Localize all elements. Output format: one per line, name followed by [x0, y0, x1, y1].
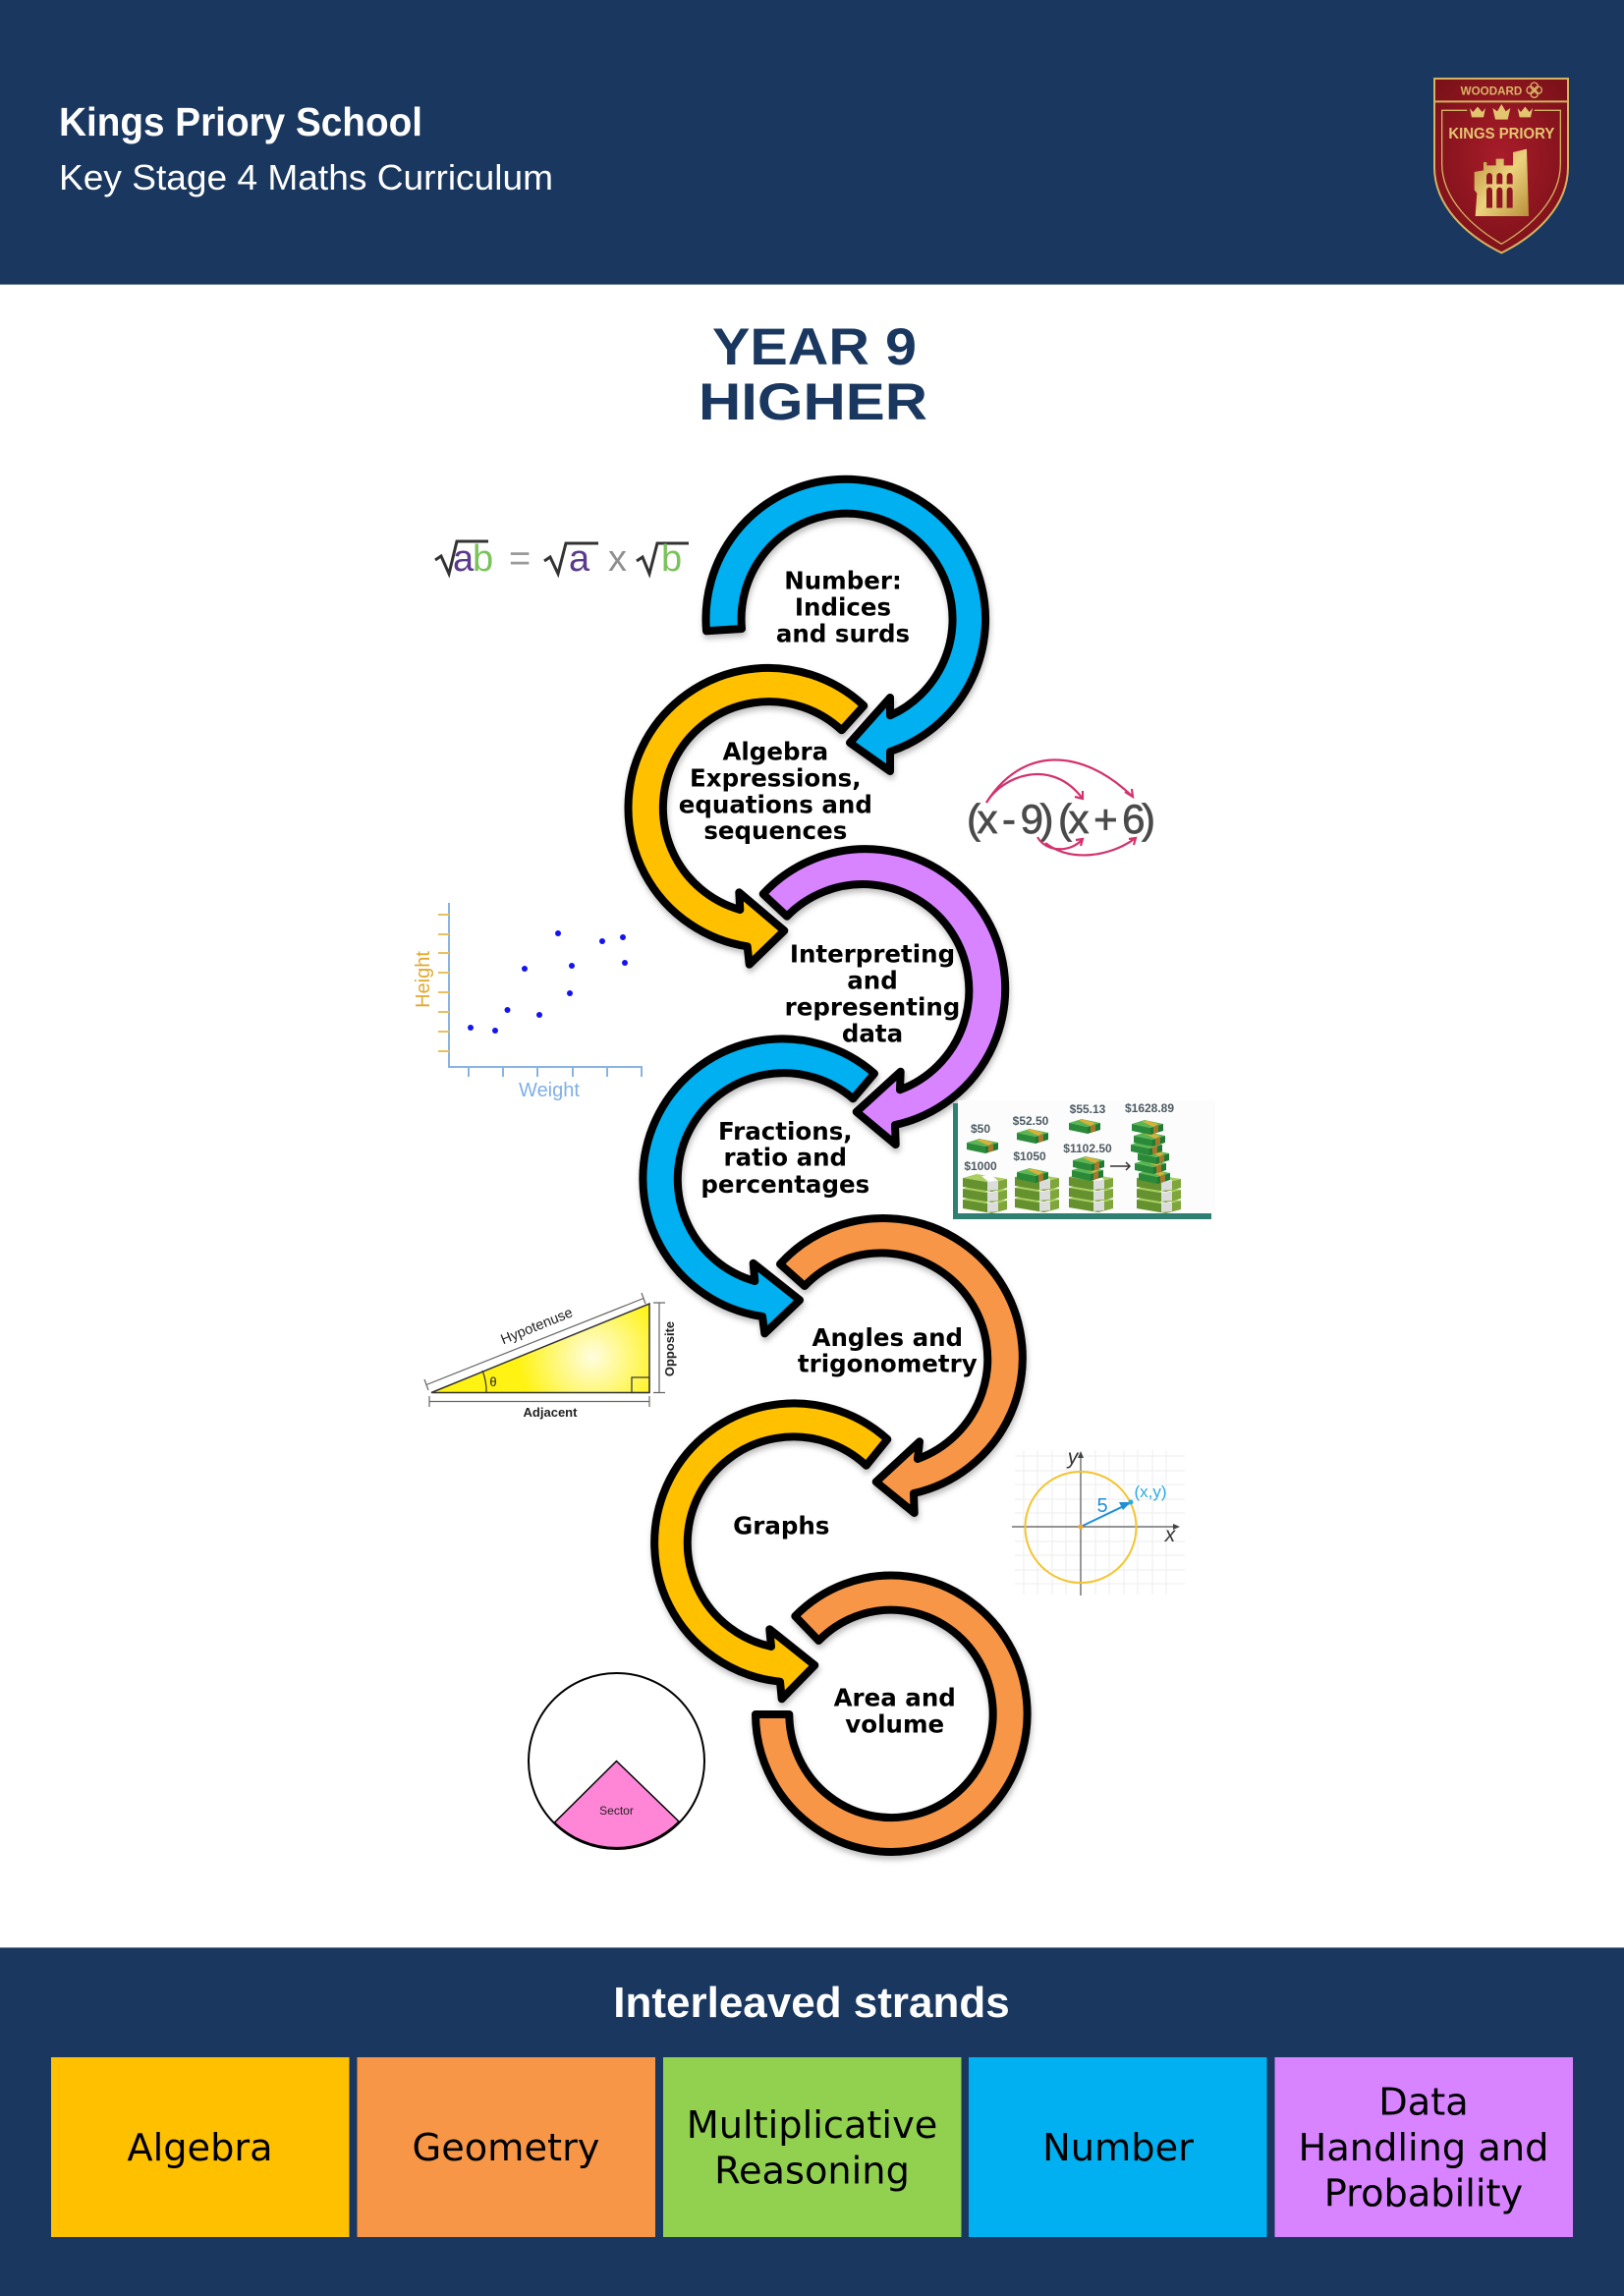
chart: scatter graph	[413, 903, 643, 1101]
label: Area and volume	[834, 1684, 956, 1738]
strand: Data Handling and Probability	[1275, 2057, 1573, 2237]
icon: right-angled triangle: Hypotenuse	[499, 1305, 575, 1348]
strand: Data Handling and Probability: Data	[1378, 2081, 1469, 2124]
arrow: Interpreting and representing data	[763, 849, 1005, 1145]
label: Fractions: Fractions,	[718, 1117, 853, 1146]
strand: Geometry	[358, 2057, 655, 2237]
icon: compound interest money chart: $1102.50	[1063, 1142, 1112, 1155]
icon: right-angled triangle	[424, 1293, 677, 1420]
arrow: Area and volume	[756, 1576, 1028, 1852]
icon: surds formula: =	[509, 538, 531, 580]
strand: Algebra	[51, 2057, 350, 2237]
footer band	[0, 1947, 1624, 2296]
icon: right-angled triangle: Opposite	[662, 1321, 677, 1376]
label: Fractions: ratio and	[723, 1144, 847, 1172]
icon: surds formula	[435, 538, 689, 580]
label: Algebra: sequences	[703, 816, 847, 845]
strand: Number: Number	[1042, 2126, 1194, 2170]
school name: Kings Priory School	[59, 99, 422, 144]
icon: compound interest money chart: $1000	[964, 1159, 997, 1173]
label: Angles: trigonometry	[798, 1350, 978, 1378]
icon: circle sector	[529, 1673, 704, 1849]
label: Fractions	[700, 1117, 869, 1199]
label: Algebra: equations and	[679, 790, 872, 818]
arrow: Number indices and surds	[705, 479, 985, 771]
label: Number: and surds	[776, 619, 910, 648]
arrow: Graphs	[654, 1403, 887, 1699]
chart: scatter graph: Weight	[519, 1080, 580, 1101]
icon: surds formula: x	[608, 538, 627, 580]
label: Algebra	[679, 737, 872, 845]
icon: compound interest money chart: $52.50	[1013, 1114, 1049, 1128]
icon: surds formula: a	[453, 538, 475, 580]
chart: circle on coordinate axes: y	[1066, 1446, 1080, 1469]
icon: school crest	[1434, 79, 1568, 252]
icon: expanding brackets	[967, 759, 1155, 855]
icon: compound interest money chart: $1628.89	[1125, 1101, 1174, 1115]
label: Area and volume: Area and	[834, 1684, 956, 1712]
icon: expanding brackets: (x - 9) (x + 6)	[967, 796, 1155, 842]
footer heading: Interleaved strands	[613, 1979, 1010, 2027]
label: Number: Indices	[795, 593, 891, 622]
title: HIGHER	[699, 373, 927, 431]
icon: surds formula: a	[569, 538, 590, 580]
arrow: Fractions, ratio and percentages	[643, 1038, 874, 1333]
icon: compound interest money chart: $1050	[1013, 1149, 1046, 1163]
chart: circle on coordinate axes: x	[1164, 1524, 1177, 1546]
title	[699, 318, 927, 431]
arrow: Algebra	[628, 668, 872, 965]
label: Area and volume: volume	[845, 1709, 944, 1738]
chart: circle on coordinate axes: (x,y)	[1134, 1483, 1167, 1501]
icon: school crest: KINGS PRIORY	[1448, 126, 1554, 142]
strand: Multiplicative Reasoning: Reasoning	[714, 2150, 910, 2193]
strand: Data Handling and Probability: Handling and	[1299, 2126, 1548, 2170]
icon: circle sector: Sector	[599, 1804, 634, 1818]
title: YEAR 9	[712, 318, 917, 376]
strand: Geometry: Geometry	[413, 2126, 599, 2170]
chart: scatter graph: Height	[413, 951, 434, 1008]
icon: surds formula: b	[473, 538, 493, 580]
strand: Algebra: Algebra	[127, 2126, 273, 2170]
label: Algebra: Algebra	[722, 737, 828, 766]
label: Number	[776, 566, 910, 648]
arrow: Angles and trigonometry	[780, 1218, 1023, 1513]
label: Interpreting	[785, 939, 960, 1048]
strand: Multiplicative Reasoning	[663, 2057, 961, 2237]
label: Number: Number:	[784, 566, 902, 595]
label: Algebra: Expressions,	[690, 763, 862, 792]
icon: compound interest money chart	[953, 1100, 1215, 1219]
icon: compound interest money chart: $50	[971, 1122, 990, 1136]
icon: surds formula: b	[661, 538, 682, 580]
icon: school crest: WOODARD	[1461, 84, 1523, 98]
subtitle: Key Stage 4 Maths Curriculum	[59, 157, 553, 197]
label: Fractions: percentages	[700, 1170, 869, 1199]
label: Angles	[798, 1323, 978, 1378]
chart: circle on coordinate axes: 5	[1096, 1495, 1108, 1517]
label: Interpreting: data	[842, 1020, 903, 1048]
icon: right-angled triangle: Adjacent	[524, 1405, 578, 1420]
strand: Multiplicative Reasoning: Multiplicative	[687, 2103, 937, 2148]
label: Interpreting: representing	[785, 992, 960, 1022]
icon: right-angled triangle: θ	[489, 1374, 497, 1389]
label: Interpreting: Interpreting	[790, 939, 955, 969]
label: Angles: Angles and	[812, 1323, 963, 1352]
chart: circle on coordinate axes	[1012, 1446, 1185, 1596]
icon: compound interest money chart: $55.13	[1070, 1102, 1106, 1116]
header band	[0, 0, 1624, 285]
strand: Number	[969, 2057, 1267, 2237]
label: Interpreting: and	[847, 967, 898, 995]
label: Graphs: Graphs	[733, 1512, 829, 1540]
strand: Data Handling and Probability: Probability	[1324, 2171, 1523, 2216]
